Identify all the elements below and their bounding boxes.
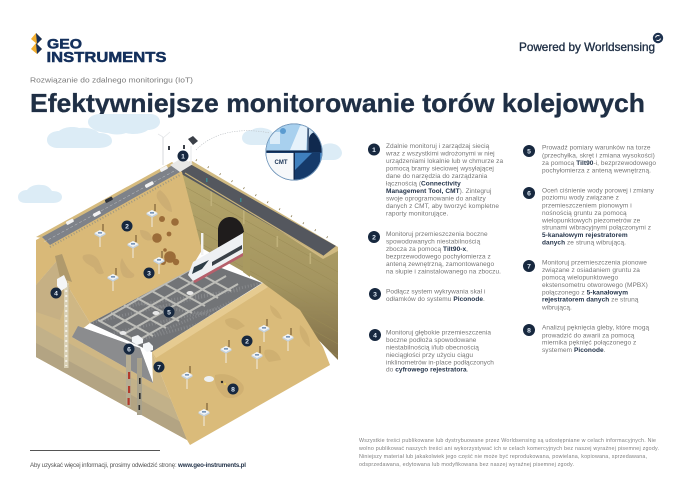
- map badges: 8: [231, 386, 235, 394]
- map badges: 3: [147, 270, 151, 278]
- map badges: [50, 150, 252, 394]
- step 2: bezprzewodowego pochyłomierza z: [386, 254, 491, 260]
- step 7: Monitoruj przemieszczenia pionowe: [542, 260, 647, 267]
- step 4: inklinometrów in-place podłączonych: [386, 359, 494, 366]
- map badges: 4: [54, 290, 58, 298]
- gateway dashed link: [196, 131, 270, 150]
- step 7: związane z osiadaniem gruntu za: [542, 267, 640, 274]
- step 3: Podłącz system wykrywania skał i: [386, 289, 485, 296]
- step 5: za pomocą Tilt90-i, bezprzewodowego: [542, 160, 656, 167]
- map badges: 2: [125, 224, 129, 230]
- step 1: swoje oprogramowanie do analizy: [386, 196, 486, 202]
- step 8: [523, 324, 650, 354]
- crack meter: [204, 376, 226, 385]
- step 2: [368, 231, 501, 276]
- left embankment slope: [36, 165, 202, 323]
- legal disclaimer: [358, 438, 659, 468]
- step 6: 5-kanałowym rejestratorem: [542, 232, 628, 239]
- step 4: nieciągłości przy użyciu ciągu: [386, 352, 473, 359]
- step 8: miernika pęknięć połączonego z: [542, 340, 636, 347]
- step 1: Zdalnie monitoruj i zarządzaj siecią: [386, 143, 490, 150]
- step 3: 3: [373, 292, 377, 298]
- gateway with solar panel: [183, 136, 198, 163]
- cross-section of ground: [36, 254, 190, 445]
- step 8: systemem Piconode.: [542, 347, 606, 354]
- title: Efektywniejsze monitorowanie torów kolejowych: [30, 88, 645, 118]
- boreholes 6: [126, 335, 153, 415]
- front sand slope: [152, 283, 330, 445]
- step 4: 4: [373, 332, 377, 340]
- step 1: Management Tool, CMT). Zintegruj: [386, 188, 491, 195]
- step 1: [368, 143, 503, 218]
- rocks: [152, 216, 179, 265]
- step 1: łącznością (Connectivity: [386, 180, 461, 188]
- step 3: odłamków do systemu Piconode.: [386, 296, 485, 303]
- step 6: wielopunktowych piezometrów ze: [541, 217, 641, 224]
- map badges: 7: [157, 364, 161, 372]
- step 1: wraz z wszystkimi wdrożonymi w niej: [385, 150, 495, 158]
- legal disclaimer: wolno publikować naszych treści ani wykorzystywać ich w celach komercyjnych bez naszej wyraźnej pisemnej zgody.: [358, 446, 659, 452]
- step 7: 7: [527, 264, 531, 270]
- step 1: raporty monitorujące.: [386, 210, 448, 218]
- step 5: (przechyłka, skręt i zmiana wysokości): [542, 152, 655, 159]
- step 3: [369, 288, 485, 303]
- wall seam over train end: [243, 232, 250, 277]
- step 2: zbocza za pomocą Tilt90-x,: [386, 246, 468, 253]
- soil patches on embankment: [83, 190, 172, 278]
- legal disclaimer: Niniejszy materiał lub jakakolwiek jego część nie może być reprodukowana, powielana, kopiowana, sprzedawana,: [359, 454, 647, 460]
- logo: Geo Instruments: GEO: [47, 36, 82, 52]
- step 1: danych z CMT, aby tworzyć kompletne: [386, 203, 499, 210]
- step 1: urządzeniami lokalnie lub w chmurze za: [386, 158, 503, 165]
- inset: CMT software lens: [266, 124, 322, 180]
- step 4: [369, 329, 494, 374]
- logo: Powered by Worldsensing: Powered by Worldsensing: [519, 40, 655, 54]
- step 8: Analizuj pęknięcia gleby, które mogą: [542, 325, 650, 332]
- step 2: anteną zewnętrzną, zamontowanego: [386, 261, 494, 268]
- tilt sensors: [94, 204, 294, 426]
- step 2: 2: [372, 234, 376, 242]
- step 4: niestabilnością i/lub obecnością: [386, 344, 479, 351]
- step 6: nośnością gruntu za pomocą: [542, 210, 627, 217]
- footer divider: [30, 450, 160, 451]
- step 5: 5: [527, 148, 531, 156]
- logo: Geo Instruments: INSTRUMENTS: [46, 49, 166, 66]
- roadway on embankment: [36, 158, 193, 247]
- step 4: do cyfrowego rejestratora.: [386, 367, 469, 374]
- train: [188, 233, 243, 283]
- step 4: boczne podłoża spowodowane: [386, 337, 477, 344]
- step 6: przemieszczeniem pionowym i: [542, 203, 632, 210]
- step 6: danych ze struną wibrującą.: [542, 239, 626, 246]
- step 6: [523, 187, 655, 246]
- step 4: Monitoruj głębokie przemieszczenia: [386, 329, 491, 336]
- step 1: 1: [372, 147, 376, 154]
- inclinometer column 4: [57, 275, 68, 368]
- map badges: 2: [245, 338, 249, 346]
- antenna tower on road: [158, 132, 170, 165]
- logo: Powered by Worldsensing: [519, 33, 663, 54]
- step 7: wibrującą.: [541, 304, 572, 311]
- step 7: ekstensometru otworowego (MPBX): [542, 282, 648, 289]
- step 6: Oceń ciśnienie wody porowej i zmiany: [542, 187, 655, 194]
- step 6: strunami wibracyjnymi połączonymi z: [542, 225, 651, 232]
- step 5: pochyłomierza z anteną wewnętrzną.: [542, 168, 651, 175]
- footer link text: Aby uzyskać więcej informacji, prosimy odwiedzić stronę: www.geo-instruments.pl: [30, 462, 246, 469]
- step 2: spowodowanych niestabilnością: [386, 238, 481, 246]
- legal disclaimer: Wszystkie treści publikowane lub dystrybuowane przez Worldsensing są udostępniane w celach informacyjnych. Nie: [359, 438, 656, 444]
- step 7: połączonego z 5-kanałowym: [542, 289, 628, 296]
- step 6: 6: [527, 190, 531, 198]
- step 1: pomocą bramy sieciowej wysyłającej: [386, 166, 494, 172]
- legal disclaimer: odsprzedawana, edytowana lub modyfikowana bez naszej wyraźnej pisemnej zgody.: [359, 462, 574, 468]
- retaining wall: [180, 172, 338, 360]
- subtitle: Rozwiązanie do zdalnego monitoringu (IoT): [30, 76, 194, 84]
- inset: CMT software lens: CMT: [274, 160, 288, 166]
- map badges: 1: [181, 154, 185, 160]
- step 6: poziomu wody związane z: [542, 195, 619, 202]
- step 1: dane do narzędzia do zarządzania: [386, 173, 488, 180]
- logo: Geo Instruments: [31, 33, 166, 66]
- step 7: rejestratorem danych ze struną: [542, 297, 639, 304]
- step 5: Prowadź pomiary warunków na torze: [542, 145, 651, 152]
- tunnel: [218, 217, 244, 254]
- step 2: na słupie i zainstalowanego na zboczu.: [386, 268, 501, 276]
- step 5: [523, 145, 656, 175]
- clouds: [18, 114, 342, 203]
- step 8: prowadzić do awarii za pomocą: [542, 332, 635, 339]
- map badges: 6: [127, 346, 131, 354]
- white post by tunnel: [201, 233, 203, 255]
- step 2: Monitoruj przemieszczenia boczne: [386, 231, 488, 238]
- step 7: [523, 260, 648, 311]
- wall-top road: [178, 160, 338, 259]
- map badges: 5: [167, 310, 171, 316]
- step 8: 8: [527, 328, 531, 334]
- step 7: pomocą wielopunktowego: [542, 275, 618, 282]
- ballast and tracks: [72, 267, 262, 383]
